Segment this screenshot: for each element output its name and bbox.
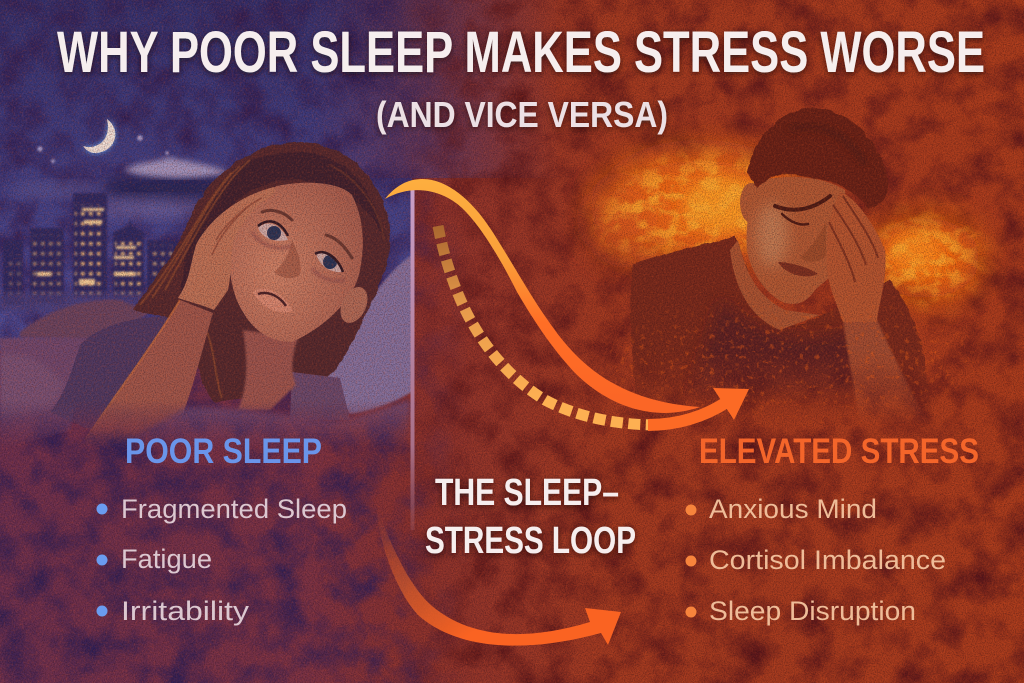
panel: elevated stress xyxy=(686,432,979,626)
eyes xyxy=(252,210,352,281)
center label xyxy=(425,472,636,562)
face xyxy=(747,177,850,304)
arrow: head of top loop xyxy=(648,388,749,425)
arrow: bottom curve xyxy=(375,500,621,646)
bullet list: Sleep Disruption xyxy=(709,596,916,626)
woman xyxy=(50,142,412,470)
divider line xyxy=(410,190,414,530)
night scene xyxy=(0,119,250,340)
neck xyxy=(238,330,298,410)
clouds xyxy=(10,157,250,218)
blanket xyxy=(139,398,410,440)
center label: THE SLEEP– xyxy=(435,472,619,514)
nose xyxy=(274,240,301,278)
stars xyxy=(38,135,169,163)
bullet list xyxy=(686,494,946,626)
hand xyxy=(827,192,886,322)
nose xyxy=(800,222,826,262)
bed xyxy=(0,337,87,437)
shirt xyxy=(630,236,931,412)
arrow: dashed return xyxy=(438,226,657,425)
hair back xyxy=(133,142,390,402)
shirt xyxy=(50,316,168,430)
arm xyxy=(80,300,213,450)
face xyxy=(230,183,363,342)
hair xyxy=(748,108,888,208)
center label: STRESS LOOP xyxy=(425,520,636,562)
bullet list: Fatigue xyxy=(121,544,212,574)
headboard xyxy=(20,300,150,340)
bullet list: Irritability xyxy=(121,596,250,626)
man xyxy=(630,108,935,435)
bullet list: Cortisol Imbalance xyxy=(709,545,946,575)
subtitle: (AND VICE VERSA) xyxy=(376,94,668,135)
pillow xyxy=(322,255,412,414)
ear xyxy=(340,287,368,323)
bullet list: Fragmented Sleep xyxy=(121,494,347,524)
bullet list: Anxious Mind xyxy=(709,494,877,524)
ear xyxy=(740,183,757,222)
neck xyxy=(730,240,820,330)
heading: ELEVATED STRESS xyxy=(699,432,979,471)
arrow: solid poor sleep to stress xyxy=(385,179,700,413)
bullet list xyxy=(96,494,347,626)
heading: POOR SLEEP xyxy=(125,432,322,471)
city skyline xyxy=(0,193,190,312)
embers over man xyxy=(596,294,980,426)
fire glow behind man xyxy=(573,129,998,318)
panel: poor sleep xyxy=(96,432,347,626)
mouth xyxy=(253,289,293,312)
icon: crescent moon xyxy=(83,119,115,153)
closed eye and brow xyxy=(775,196,830,225)
forearm xyxy=(842,320,918,410)
mouth xyxy=(778,262,818,276)
hand xyxy=(178,187,275,310)
